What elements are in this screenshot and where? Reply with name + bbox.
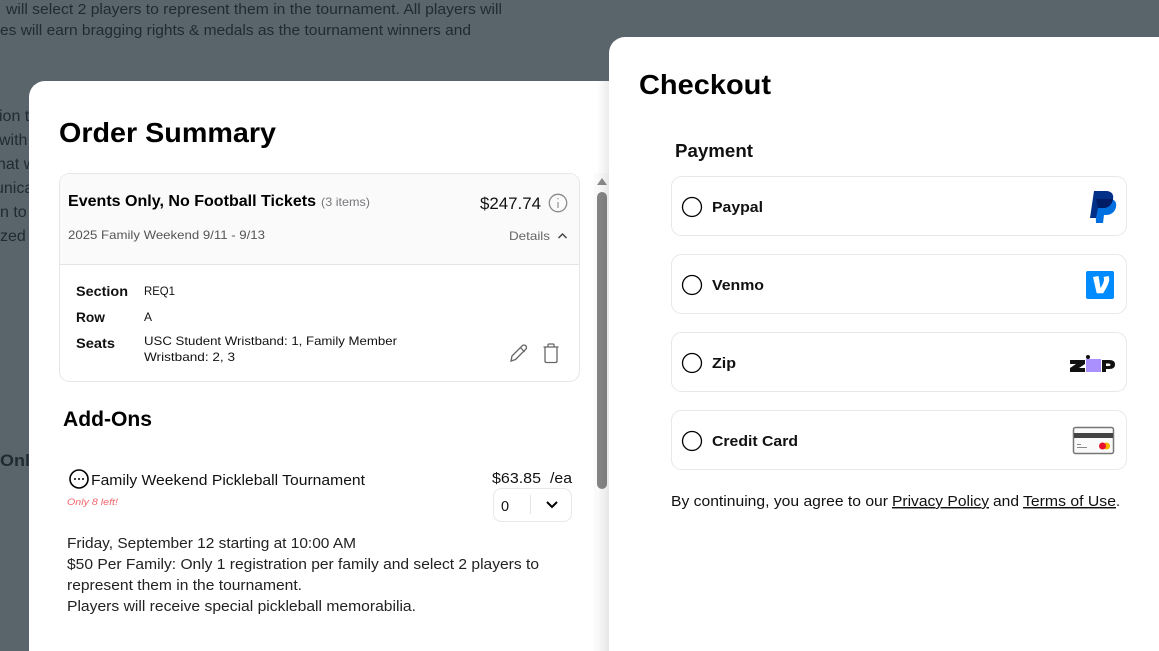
icon: trash can <box>544 344 558 362</box>
details toggle: Details <box>509 229 550 243</box>
legal text: Privacy Policy <box>892 494 990 510</box>
icon: edit pencil <box>511 345 526 361</box>
row: seats <box>76 334 397 364</box>
dimmed background page text: will select 2 players to represent them in the tournament. All players will <box>5 1 502 18</box>
ticket title: Events Only, No Football Tickets <box>68 193 316 210</box>
row: row letter: Row <box>76 309 105 325</box>
panel: checkout <box>609 37 1159 651</box>
icon: more options circle <box>70 470 88 488</box>
add-on description: Players will receive special pickleball memorabilia. <box>67 599 416 615</box>
legal text <box>671 494 1120 510</box>
card: ticket details <box>60 174 580 382</box>
dimmed background page text: n to <box>0 204 27 221</box>
legal text: and <box>993 494 1019 510</box>
icon: venmo logo <box>1086 271 1114 299</box>
add-on price <box>492 471 573 487</box>
add-on description: represent them in the tournament. <box>67 578 302 594</box>
ticket price: $247.74 <box>480 194 541 213</box>
row: section: Section <box>76 283 128 299</box>
low stock note: Only 8 left! <box>67 497 118 508</box>
legal text: Terms of Use <box>1023 494 1116 510</box>
add-on description <box>67 536 539 615</box>
legal text: By continuing, you agree to our <box>671 494 888 510</box>
heading: payment: Payment <box>675 141 753 161</box>
quantity selector <box>494 488 572 522</box>
option: paypal <box>672 176 1126 236</box>
item count: (3 items) <box>321 195 370 209</box>
option: paypal: Paypal <box>712 199 763 216</box>
option: credit card: Credit Card <box>712 433 798 450</box>
add-on title: Family Weekend Pickleball Tournament <box>91 472 366 489</box>
dimmed background page text: es will earn bragging rights & medals as the tournament winners and <box>0 22 471 39</box>
scrollbar <box>594 173 609 651</box>
row: seats: Seats <box>76 335 115 351</box>
option: venmo <box>672 254 1126 314</box>
dimmed background page text: zed <box>0 228 26 245</box>
row: row letter <box>76 309 152 325</box>
panel: order summary <box>29 81 649 651</box>
icon: paypal logo <box>1090 191 1116 223</box>
row: section <box>76 283 175 299</box>
row: row letter: A <box>144 310 152 324</box>
row: seats: USC Student Wristband: 1, Family Member <box>144 334 397 348</box>
option: credit card <box>672 410 1126 470</box>
row: section: REQ1 <box>144 284 175 298</box>
add-on: pickleball tournament <box>67 470 573 615</box>
details toggle <box>509 229 566 243</box>
icon: info <box>549 194 567 212</box>
icon: zip logo <box>1070 355 1115 372</box>
heading: checkout: Checkout <box>639 69 771 100</box>
option: zip: Zip <box>712 355 736 372</box>
quantity selector: 0 <box>501 499 509 515</box>
option: zip <box>672 332 1126 392</box>
add-on description: Friday, September 12 starting at 10:00 AM <box>67 536 356 552</box>
option: venmo: Venmo <box>712 277 764 294</box>
row: seats: Wristband: 2, 3 <box>144 350 235 364</box>
event name: 2025 Family Weekend 9/11 - 9/13 <box>68 228 265 242</box>
add-on description: $50 Per Family: Only 1 registration per family and select 2 players to <box>67 557 539 573</box>
add-on price: /ea <box>550 471 573 487</box>
heading: add-ons: Add-Ons <box>63 408 152 431</box>
dimmed background page text: Onl <box>0 451 30 470</box>
legal text: . <box>1116 494 1120 510</box>
icon: credit card <box>1074 428 1114 454</box>
add-on price: $63.85 <box>492 471 541 487</box>
heading: order summary: Order Summary <box>59 117 276 148</box>
